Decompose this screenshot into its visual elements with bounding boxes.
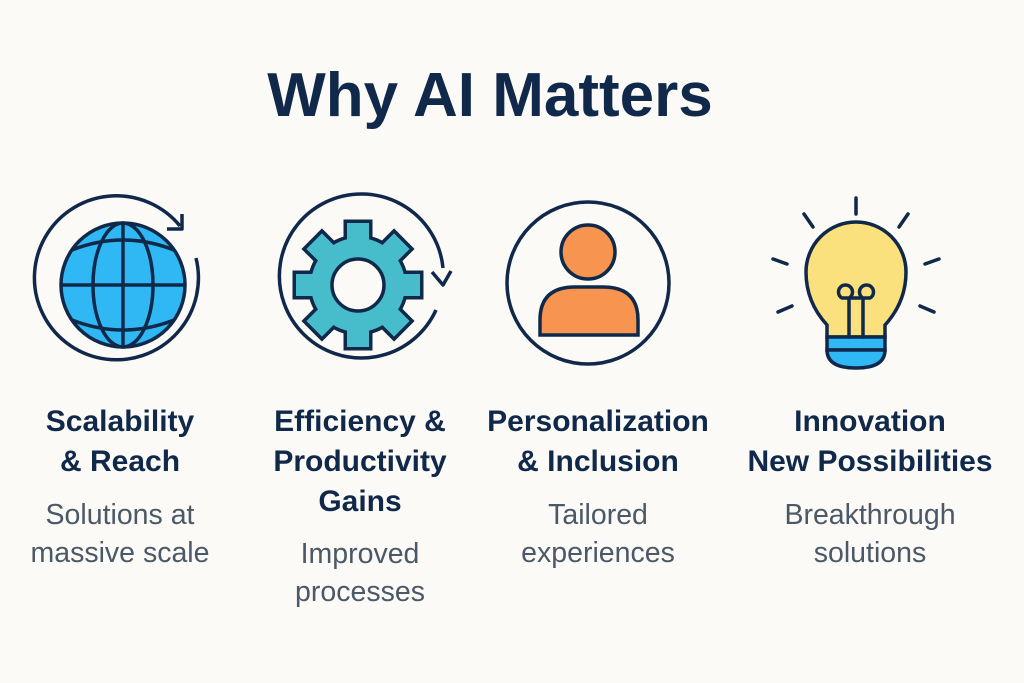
icon: globe xyxy=(34,196,198,360)
column 4 text: solutions xyxy=(814,537,926,569)
column 3 text: Tailored xyxy=(548,499,648,531)
column 2 text: Efficiency & xyxy=(274,405,446,438)
title: Why AI Matters xyxy=(267,61,713,130)
column 4 text xyxy=(747,405,993,569)
column 2 text: Productivity xyxy=(273,445,447,478)
column 1 text: massive scale xyxy=(30,537,209,569)
icon: person xyxy=(507,202,669,364)
column 2 text: Gains xyxy=(318,485,402,518)
column 4 text: Innovation xyxy=(794,405,946,438)
column 1 text: & Reach xyxy=(60,445,180,478)
column 1 text: Solutions at xyxy=(46,499,194,531)
column 2 text: processes xyxy=(295,576,425,608)
column 4 text: New Possibilities xyxy=(747,445,993,478)
column 1 text xyxy=(30,405,209,569)
icon: gear xyxy=(270,194,451,373)
column 1 text: Scalability xyxy=(46,405,194,438)
column 3 text xyxy=(487,405,709,569)
column 3 text: & Inclusion xyxy=(517,445,679,478)
icon: lightbulb xyxy=(773,198,939,368)
column 2 text xyxy=(273,405,447,608)
column 3 text: experiences xyxy=(521,537,675,569)
column 4 text: Breakthrough xyxy=(784,499,956,531)
column 3 text: Personalization xyxy=(487,405,709,438)
column 2 text: Improved xyxy=(301,538,419,570)
